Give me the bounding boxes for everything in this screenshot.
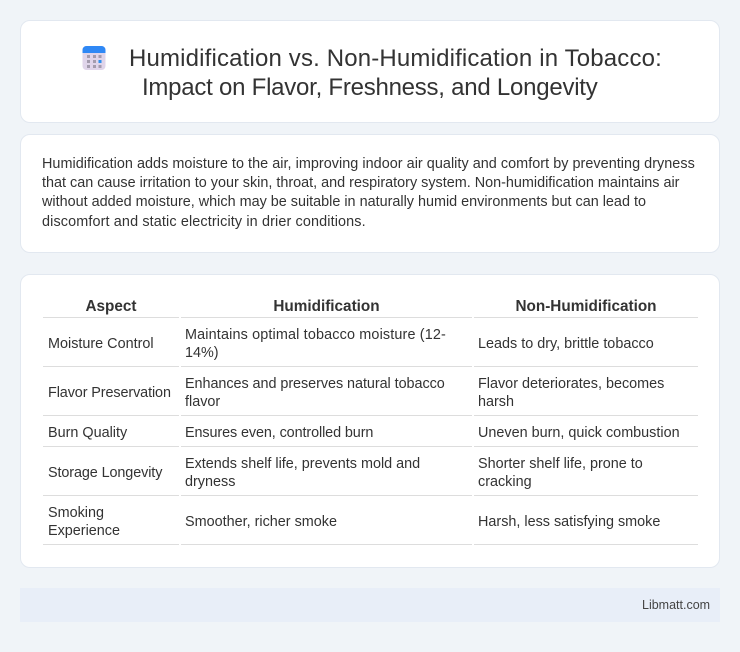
- row: storage longevity: Shorter shelf life, prone to: [478, 456, 643, 472]
- intro text: that can cause irritation to your skin, throat, and respiratory system. Non-humidification maintains air: [42, 175, 679, 191]
- row: flavor preservation: Enhances and preserves natural tobacco: [185, 376, 445, 392]
- intro text: [42, 156, 695, 230]
- row: burn quality: [48, 425, 680, 441]
- row: smoking experience: Smoking: [48, 505, 104, 521]
- table header: [85, 298, 657, 315]
- table header: Non-Humidification: [515, 298, 657, 315]
- intro text: Humidification adds moisture to the air, improving indoor air quality and comfort by preventing dryness: [42, 156, 695, 172]
- row: storage longevity: cracking: [478, 474, 532, 490]
- intro panel: [20, 134, 720, 253]
- intro text: discomfort and static electricity in drier conditions.: [42, 214, 366, 230]
- title: Impact on Flavor, Freshness, and Longevity: [142, 74, 598, 101]
- row: flavor preservation: Flavor Preservation: [48, 385, 171, 401]
- row: flavor preservation: harsh: [478, 394, 514, 410]
- row: storage longevity: [48, 456, 643, 490]
- row: moisture control: Moisture Control: [48, 336, 154, 352]
- table header: Aspect: [85, 298, 136, 315]
- row: moisture control: [48, 327, 654, 361]
- row: storage longevity: dryness: [185, 474, 235, 490]
- row: burn quality: Ensures even, controlled burn: [185, 425, 373, 441]
- row: storage longevity: Extends shelf life, prevents mold and: [185, 456, 420, 472]
- row: smoking experience: Experience: [48, 523, 120, 539]
- row: flavor preservation: flavor: [185, 394, 220, 410]
- footer text: Libmatt.com: [642, 598, 710, 612]
- table header: Humidification: [273, 298, 380, 315]
- intro text: without added moisture, which may be suitable in naturally humid environments but can lead to: [42, 194, 646, 210]
- row: smoking experience: [48, 505, 660, 539]
- row: burn quality: Uneven burn, quick combustion: [478, 425, 680, 441]
- row: moisture control: Leads to dry, brittle tobacco: [478, 336, 654, 352]
- row: smoking experience: Smoother, richer smoke: [185, 514, 337, 530]
- row: flavor preservation: [48, 376, 664, 410]
- row: moisture control: 14%): [185, 345, 219, 361]
- title: [129, 45, 662, 101]
- row: storage longevity: Storage Longevity: [48, 465, 162, 481]
- footer bar: [20, 588, 720, 622]
- header panel: [20, 20, 720, 123]
- title: Humidification vs. Non-Humidification in Tobacco:: [129, 45, 662, 72]
- table panel: [20, 274, 720, 568]
- icon: calendar: [82, 46, 106, 70]
- row: burn quality: Burn Quality: [48, 425, 127, 441]
- row: flavor preservation: Flavor deteriorates, becomes: [478, 376, 664, 392]
- row: moisture control: Maintains optimal tobacco moisture (12-: [185, 327, 446, 343]
- row: smoking experience: Harsh, less satisfying smoke: [478, 514, 660, 530]
